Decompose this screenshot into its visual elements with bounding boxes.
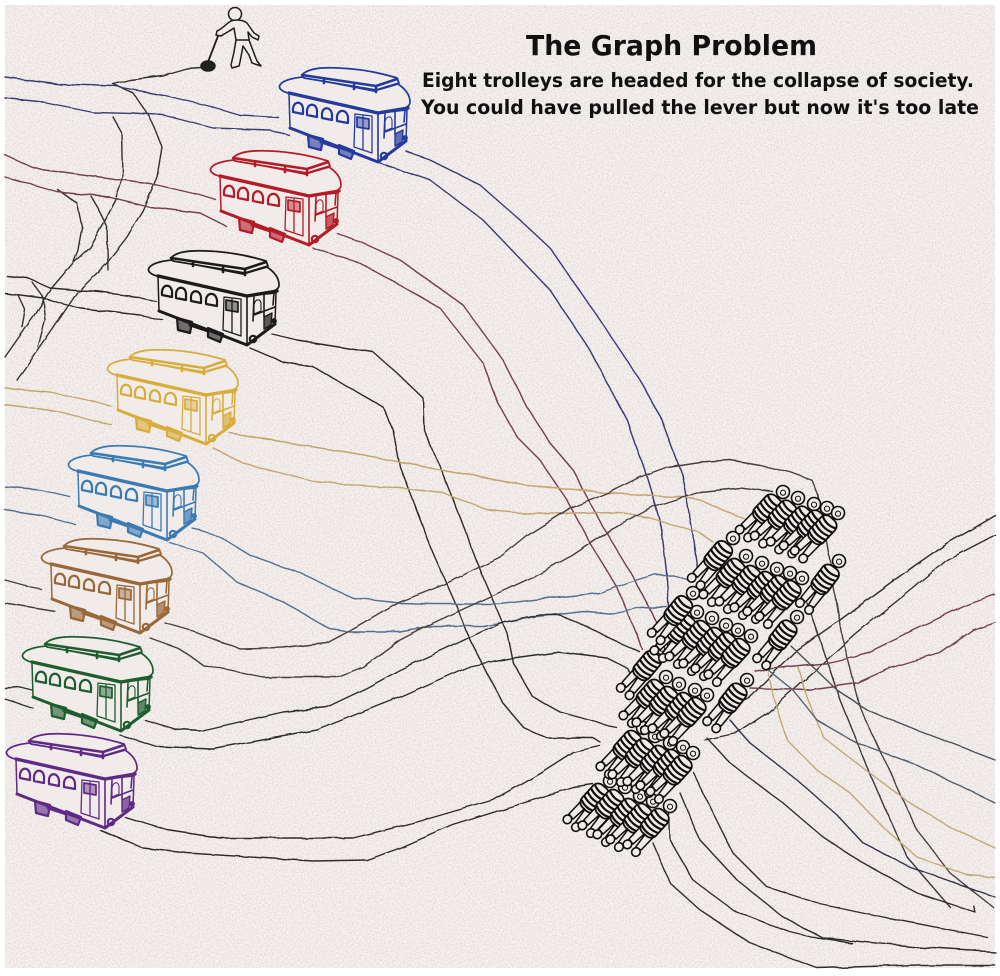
left tracks: blue trolley (5, 77, 290, 136)
black trolley tracks (250, 334, 617, 742)
trolley: purple (6, 734, 137, 828)
light blue tracks (170, 528, 693, 632)
crowd of people tied to the tracks (561, 480, 851, 858)
trolley: red (210, 151, 341, 245)
row 1 of people (734, 480, 850, 565)
left tracks: green trolley (5, 687, 33, 708)
left tracks: light blue trolley (5, 487, 76, 525)
trolley: blue (279, 68, 410, 162)
yellow tracks (213, 433, 747, 542)
row 3 of people (646, 581, 809, 688)
left tracks: black trolley (5, 276, 163, 320)
blue tracks (380, 152, 698, 607)
purple trolley tracks (100, 746, 600, 861)
icon: man at the lever (201, 8, 261, 71)
trolley: light blue (68, 446, 199, 540)
left tracks: brown trolley (5, 580, 55, 611)
tracks running from the trolleys to the crowd and beyond (100, 152, 995, 968)
subtitle line 1: Eight trolleys are headed for the collapse of society. (422, 69, 974, 92)
lever branch lines (5, 68, 202, 380)
brown tracks (150, 460, 993, 907)
row 5 of people (594, 716, 705, 805)
subtitle line 2: You could have pulled the lever but now it's too late (420, 96, 979, 119)
row 2 of people (686, 526, 851, 630)
trolley: yellow (107, 350, 238, 444)
green tracks (120, 615, 640, 749)
left tracks: yellow trolley (5, 388, 112, 425)
row 4 of people (615, 636, 759, 747)
trolley: brown (41, 539, 172, 633)
trolley: black (148, 251, 279, 345)
tracks continuing right of the crowd (653, 515, 995, 968)
row 6 of people (561, 769, 682, 858)
red tracks (313, 233, 657, 650)
left tracks: red trolley (5, 155, 226, 226)
title: The Graph Problem (526, 29, 817, 62)
tracks leading from the left edge to the trolleys (5, 68, 290, 708)
trolley: green (22, 637, 153, 731)
